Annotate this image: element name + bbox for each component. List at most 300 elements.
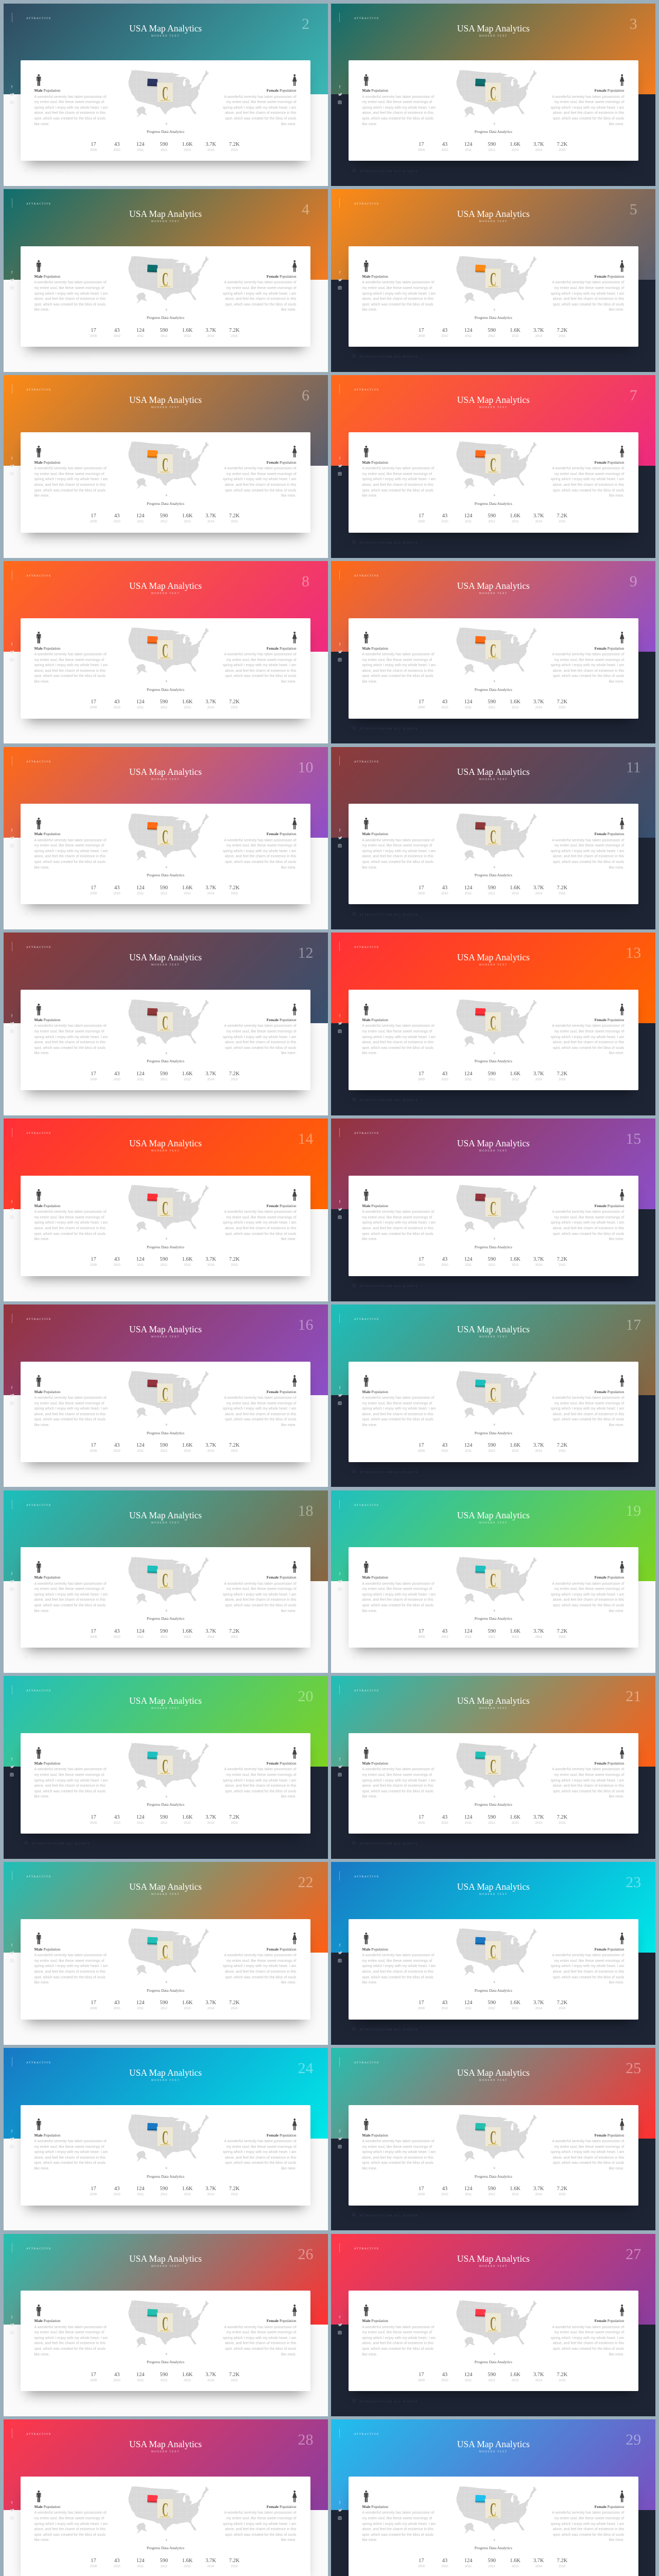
stats heading: Progress Data Analytics xyxy=(475,873,512,877)
stats: 17 xyxy=(419,1257,424,1262)
title: USA Map Analytics xyxy=(129,2439,202,2449)
male text: A wonderful serenity has taken possession of xyxy=(362,653,434,656)
male text: like mine. xyxy=(362,308,377,312)
stats: 3.7K xyxy=(205,2186,216,2192)
stats: 2015 xyxy=(231,706,238,709)
male text: alone, and feel the charm of existence in this xyxy=(34,1413,106,1416)
female text xyxy=(551,1953,624,1986)
header gradient xyxy=(331,1490,655,1581)
stats xyxy=(82,1814,252,1825)
subtitle: MODERN TEXT xyxy=(151,406,180,409)
stats: 2011 xyxy=(137,1264,144,1267)
label: ATTRACTIVE xyxy=(354,17,379,20)
female text: A wonderful serenity has taken possession of xyxy=(224,653,297,656)
male heading: Male Population xyxy=(34,274,60,279)
female text: A wonderful serenity has taken possession of xyxy=(224,281,297,284)
stats: 2015 xyxy=(559,335,566,338)
stats: 2009 xyxy=(90,2379,97,2382)
header gradient xyxy=(3,1676,327,1767)
male text: spring which I enjoy with my whole heart. I am xyxy=(34,2150,108,2154)
footer xyxy=(352,1283,418,1289)
subtitle: MODERN TEXT xyxy=(151,778,180,781)
stats: 1.6K xyxy=(182,885,193,891)
female text: alone, and feel the charm of existence in this xyxy=(225,2342,297,2345)
stats: 2015 xyxy=(559,520,566,523)
stats: 2015 xyxy=(231,1078,238,1081)
male text: spring which I enjoy with my whole heart. I am xyxy=(34,1036,108,1039)
page number: 12 xyxy=(298,944,313,961)
male text: A wonderful serenity has taken possession of xyxy=(362,839,434,842)
social icons xyxy=(9,1570,14,1591)
female icon xyxy=(292,260,297,272)
stats: 2010 xyxy=(441,1636,448,1639)
stats: 43 xyxy=(114,699,119,705)
female text: like mine. xyxy=(281,1238,297,1241)
male text xyxy=(34,1024,108,1057)
stats: 43 xyxy=(114,1257,119,1262)
stats: 43 xyxy=(442,1815,447,1820)
female text: my entire soul, like these sweet mornings of xyxy=(227,1402,297,1405)
stats: 43 xyxy=(442,142,447,147)
stats: 1.6K xyxy=(182,2000,193,2006)
male text xyxy=(34,1582,108,1614)
male text: spring which I enjoy with my whole heart. I am xyxy=(362,1593,436,1597)
male icon xyxy=(363,632,369,643)
stats: 2012 xyxy=(161,1264,167,1267)
footer xyxy=(352,2027,418,2032)
female text: my entire soul, like these sweet mornings of xyxy=(227,286,297,290)
stats: 2013 xyxy=(512,706,518,709)
male text: spring which I enjoy with my whole heart. I am xyxy=(362,1964,436,1968)
stats xyxy=(409,699,579,710)
stats: 17 xyxy=(91,328,96,333)
stats: 2010 xyxy=(113,1450,120,1453)
stats: 17 xyxy=(419,142,424,147)
female icon xyxy=(291,446,297,457)
slide 26 xyxy=(3,2234,327,2416)
stats: 17 xyxy=(419,2000,424,2006)
female text: spot, which was created for the bliss of souls xyxy=(553,489,624,493)
female text: alone, and feel the charm of existence in this xyxy=(553,1784,624,1788)
female text: A wonderful serenity has taken possession of xyxy=(552,467,624,470)
label: ATTRACTIVE xyxy=(26,17,51,20)
male text: spring which I enjoy with my whole heart. I am xyxy=(362,478,436,481)
stats: 2015 xyxy=(231,520,238,523)
female text: alone, and feel the charm of existence in this xyxy=(553,483,624,487)
stats xyxy=(82,2185,252,2197)
female text: spot, which was created for the bliss of souls xyxy=(225,2161,297,2165)
social icons xyxy=(337,1384,342,1405)
stats: 2009 xyxy=(418,149,425,152)
female text: my entire soul, like these sweet mornings of xyxy=(554,472,624,476)
stats: 17 xyxy=(91,2558,96,2564)
header gradient xyxy=(3,561,327,652)
card xyxy=(349,2105,638,2206)
female text: A wonderful serenity has taken possession of xyxy=(552,839,624,842)
subtitle: MODERN TEXT xyxy=(151,1150,180,1153)
stats: 2015 xyxy=(231,1636,238,1639)
stats: 17 xyxy=(419,1815,424,1820)
female text: A wonderful serenity has taken possession of xyxy=(224,1210,297,1214)
male text: my entire soul, like these sweet mornings of xyxy=(34,1587,104,1591)
slide 7 xyxy=(331,375,655,558)
stats xyxy=(409,1628,579,1639)
female heading: Female Population xyxy=(267,1575,297,1580)
footer xyxy=(352,2213,418,2218)
female text xyxy=(223,1582,297,1614)
USA map: C xyxy=(490,1569,496,1590)
female text: like mine. xyxy=(281,308,297,312)
footer: © xyxy=(352,168,356,173)
footer xyxy=(352,912,418,918)
female text: like mine. xyxy=(609,2538,624,2542)
stats: 7.2K xyxy=(557,1815,567,1820)
female text: like mine. xyxy=(281,2538,297,2542)
female heading: Female Population xyxy=(267,1761,297,1766)
stats: 590 xyxy=(488,1629,496,1634)
subtitle: MODERN TEXT xyxy=(151,1336,180,1338)
male text: spot, which was created for the bliss of souls xyxy=(362,1790,433,1793)
male text xyxy=(34,2139,108,2172)
stats: 1.6K xyxy=(510,1071,521,1077)
stats: 2009 xyxy=(90,1636,97,1639)
stats: 2010 xyxy=(441,892,448,895)
male text: spot, which was created for the bliss of souls xyxy=(362,1976,433,1979)
female icon xyxy=(291,1189,297,1201)
stats: 590 xyxy=(160,1071,168,1077)
female text: A wonderful serenity has taken possession of xyxy=(552,95,624,99)
footer xyxy=(25,1655,90,1661)
female text: spring which I enjoy with my whole heart. I am xyxy=(551,2150,624,2154)
stats: 2010 xyxy=(113,2007,120,2010)
male text: like mine. xyxy=(34,2538,49,2542)
footer: ATTRACTIVEJAM ALL RIGHTS xyxy=(359,2029,418,2031)
stats: 2011 xyxy=(465,149,472,152)
male heading: Male Population xyxy=(362,1575,388,1580)
male text: spot, which was created for the bliss of souls xyxy=(362,1046,433,1050)
social icons xyxy=(10,271,14,290)
USA map: C xyxy=(162,1384,168,1405)
female text: spring which I enjoy with my whole heart. I am xyxy=(551,292,624,296)
female text: alone, and feel the charm of existence in this xyxy=(225,2156,297,2160)
female icon xyxy=(620,74,625,86)
footer: ATTRACTIVEJAM ALL RIGHTS xyxy=(359,171,418,173)
stats: 43 xyxy=(114,142,119,147)
card xyxy=(21,990,310,1090)
social icons xyxy=(337,1756,342,1776)
page number: 17 xyxy=(626,1316,641,1333)
female text: spot, which was created for the bliss of souls xyxy=(225,860,297,864)
male text: my entire soul, like these sweet mornings of xyxy=(362,286,432,290)
stats: 2014 xyxy=(207,2007,214,2010)
stats: 43 xyxy=(442,1443,447,1448)
stats: 590 xyxy=(160,2000,168,2006)
label: ATTRACTIVE xyxy=(354,2247,379,2250)
stats: 2010 xyxy=(441,2565,448,2568)
social icons xyxy=(9,1942,14,1962)
female text xyxy=(223,280,297,312)
stats: 2015 xyxy=(231,2565,238,2568)
stats: 2013 xyxy=(512,1636,518,1639)
female text: my entire soul, like these sweet mornings of xyxy=(227,1959,297,1963)
page number: 24 xyxy=(298,2060,313,2077)
stats: 7.2K xyxy=(557,2372,567,2378)
stats heading: Progress Data Analytics xyxy=(475,2546,512,2550)
stats: 2013 xyxy=(512,520,518,523)
stats: 124 xyxy=(136,513,145,519)
stats: 43 xyxy=(114,885,119,891)
male text: like mine. xyxy=(34,308,49,312)
stats: 124 xyxy=(464,2186,472,2192)
slide 18 xyxy=(3,1490,327,1673)
male text: A wonderful serenity has taken possession of xyxy=(362,95,434,99)
footer: © xyxy=(25,1840,28,1845)
stats: 43 xyxy=(442,1257,447,1262)
stats: 7.2K xyxy=(229,699,239,705)
male text: my entire soul, like these sweet mornings of xyxy=(362,1402,432,1405)
female heading: Female Population xyxy=(267,2318,297,2323)
card xyxy=(21,2105,310,2206)
title: USA Map Analytics xyxy=(457,1696,530,1706)
stats: 2014 xyxy=(535,2565,542,2568)
male text xyxy=(362,1024,436,1057)
page number: 9 xyxy=(630,573,637,590)
stats: 2010 xyxy=(113,1078,120,1081)
female text: my entire soul, like these sweet mornings of xyxy=(227,100,297,104)
female text xyxy=(223,1767,297,1800)
male text: alone, and feel the charm of existence in this xyxy=(34,297,106,301)
stats: 590 xyxy=(160,699,168,705)
page number: 22 xyxy=(298,1874,313,1891)
male heading: Male Population xyxy=(362,88,388,93)
female text: my entire soul, like these sweet mornings of xyxy=(227,472,297,476)
female text: spring which I enjoy with my whole heart. I am xyxy=(223,1407,297,1411)
female text xyxy=(551,2511,624,2544)
stats: 2014 xyxy=(535,2193,542,2196)
stats: 2013 xyxy=(184,1822,191,1825)
footer: ATTRACTIVEJAM ALL RIGHTS xyxy=(32,542,90,545)
USA map: C xyxy=(162,2127,168,2148)
male text: A wonderful serenity has taken possession of xyxy=(34,1954,107,1957)
stats: 1.6K xyxy=(510,328,521,333)
header gradient xyxy=(331,2048,655,2139)
footer: ATTRACTIVEJAM ALL RIGHTS xyxy=(359,1285,418,1288)
stats: 2009 xyxy=(418,1450,425,1453)
stats xyxy=(409,327,579,338)
footer: © xyxy=(25,539,28,545)
female text: my entire soul, like these sweet mornings of xyxy=(227,1030,297,1033)
male text: spot, which was created for the bliss of souls xyxy=(34,2533,106,2537)
footer: © xyxy=(25,725,28,731)
male text: A wonderful serenity has taken possession of xyxy=(34,1582,107,1586)
female text: spring which I enjoy with my whole heart. I am xyxy=(551,1593,624,1597)
title: USA Map Analytics xyxy=(457,2067,530,2078)
subtitle: MODERN TEXT xyxy=(479,2079,508,2082)
female text: spot, which was created for the bliss of souls xyxy=(225,489,297,493)
stats: 2014 xyxy=(535,335,542,338)
stats: 7.2K xyxy=(229,2186,239,2192)
female text xyxy=(223,2511,297,2544)
stats: 1.6K xyxy=(510,1257,521,1262)
female text: like mine. xyxy=(281,1981,297,1985)
female text: spot, which was created for the bliss of souls xyxy=(225,117,297,121)
stats: 3.7K xyxy=(533,1257,544,1262)
female text: my entire soul, like these sweet mornings of xyxy=(554,2145,624,2149)
female text: spring which I enjoy with my whole heart. I am xyxy=(223,1779,297,1783)
stats: 2015 xyxy=(231,1450,238,1453)
male text: A wonderful serenity has taken possession of xyxy=(34,839,107,842)
female text: A wonderful serenity has taken possession of xyxy=(224,467,297,470)
label: ATTRACTIVE xyxy=(354,574,379,578)
stats: 7.2K xyxy=(557,2186,567,2192)
stats: 2011 xyxy=(465,1822,472,1825)
male icon xyxy=(364,260,369,272)
stats: 2009 xyxy=(90,1078,97,1081)
female text xyxy=(551,2325,624,2358)
female text: spot, which was created for the bliss of souls xyxy=(225,1418,297,1421)
stats heading: Progress Data Analytics xyxy=(147,2174,184,2179)
female heading: Female Population xyxy=(595,2318,624,2323)
stats: 2014 xyxy=(207,335,214,338)
stats: 2009 xyxy=(418,1822,425,1825)
page number: 21 xyxy=(626,1688,641,1705)
male text: spring which I enjoy with my whole heart. I am xyxy=(34,2336,108,2340)
female text: spot, which was created for the bliss of souls xyxy=(225,303,297,307)
female text: like mine. xyxy=(609,1609,624,1613)
female text: like mine. xyxy=(609,2167,624,2171)
stats: 2013 xyxy=(512,1450,518,1453)
stats: 2011 xyxy=(465,1450,472,1453)
stats: 3.7K xyxy=(205,1815,216,1820)
footer: ATTRACTIVEJAM ALL RIGHTS xyxy=(359,728,418,731)
female text: my entire soul, like these sweet mornings of xyxy=(227,844,297,848)
stats heading: Progress Data Analytics xyxy=(475,129,512,134)
female text: spot, which was created for the bliss of souls xyxy=(553,2161,624,2165)
male text: like mine. xyxy=(34,1423,49,1427)
stats xyxy=(82,885,252,896)
male icon xyxy=(36,1747,41,1759)
stats: 3.7K xyxy=(205,328,216,333)
female text: spring which I enjoy with my whole heart. I am xyxy=(223,1964,297,1968)
stats: 17 xyxy=(91,699,96,705)
male text: alone, and feel the charm of existence in this xyxy=(362,669,433,673)
female text: spot, which was created for the bliss of souls xyxy=(225,1232,297,1236)
stats: 2010 xyxy=(113,2379,120,2382)
female text: spot, which was created for the bliss of souls xyxy=(553,2533,624,2537)
stats: 2009 xyxy=(90,892,97,895)
stats: 590 xyxy=(160,1443,168,1448)
stats: 17 xyxy=(419,328,424,333)
footer: ATTRACTIVEJAM ALL RIGHTS xyxy=(32,1843,90,1845)
female text: spot, which was created for the bliss of souls xyxy=(553,860,624,864)
header gradient xyxy=(331,4,655,94)
male text: spring which I enjoy with my whole heart. I am xyxy=(362,850,436,853)
stats: 2014 xyxy=(535,892,542,895)
stats: 2011 xyxy=(465,892,472,895)
social icons xyxy=(337,2499,342,2520)
stats: 2012 xyxy=(161,1822,167,1825)
slide 3 xyxy=(331,4,655,186)
male text xyxy=(362,1396,436,1428)
stats xyxy=(82,2371,252,2383)
male text xyxy=(34,466,108,499)
subtitle: MODERN TEXT xyxy=(479,35,508,38)
stats: 2013 xyxy=(512,892,518,895)
title: USA Map Analytics xyxy=(129,2253,202,2264)
male text xyxy=(34,2511,108,2544)
female text: my entire soul, like these sweet mornings of xyxy=(227,2517,297,2520)
male text: my entire soul, like these sweet mornings of xyxy=(362,1959,432,1963)
stats: 17 xyxy=(419,2372,424,2378)
page number: 14 xyxy=(298,1130,313,1147)
subtitle: MODERN TEXT xyxy=(479,2451,508,2453)
header gradient xyxy=(331,561,655,652)
stats: 2009 xyxy=(90,706,97,709)
female text xyxy=(223,95,297,126)
slide 27 xyxy=(331,2234,655,2416)
social icons xyxy=(9,455,14,476)
social icons xyxy=(9,1012,14,1033)
male text: spot, which was created for the bliss of souls xyxy=(362,117,433,121)
male text: A wonderful serenity has taken possession of xyxy=(362,1024,434,1028)
stats: 2011 xyxy=(465,2193,472,2196)
USA map xyxy=(405,1172,570,1264)
male text: my entire soul, like these sweet mornings of xyxy=(34,1030,104,1033)
stats: 124 xyxy=(136,1629,145,1634)
footer: ATTRACTIVEJAM ALL RIGHTS xyxy=(359,2401,418,2403)
stats heading: Progress Data Analytics xyxy=(475,1616,512,1621)
stats: 1.6K xyxy=(182,1071,193,1077)
stats: 17 xyxy=(419,2186,424,2192)
USA map: C xyxy=(490,1941,496,1962)
female heading: Female Population xyxy=(267,646,297,651)
stats: 2013 xyxy=(512,1078,518,1081)
male text: my entire soul, like these sweet mornings of xyxy=(362,2331,432,2334)
slide 23 xyxy=(331,1862,655,2045)
female text xyxy=(223,652,297,685)
stats: 124 xyxy=(136,1257,145,1262)
male text: alone, and feel the charm of existence in this xyxy=(34,1784,106,1788)
female text: alone, and feel the charm of existence in this xyxy=(225,1413,297,1416)
footer xyxy=(25,540,90,546)
stats: 2012 xyxy=(488,1822,495,1825)
stats: 2014 xyxy=(207,1450,214,1453)
stats: 2012 xyxy=(161,149,167,152)
male text: alone, and feel the charm of existence in this xyxy=(34,483,106,487)
USA map xyxy=(405,1915,570,2008)
stats: 2012 xyxy=(488,2379,495,2382)
male text: spot, which was created for the bliss of souls xyxy=(34,860,106,864)
header gradient xyxy=(331,1118,655,1209)
stats: 3.7K xyxy=(533,1071,544,1077)
female text: like mine. xyxy=(609,680,624,684)
stats: 7.2K xyxy=(557,885,567,891)
stats: 43 xyxy=(442,328,447,333)
stats xyxy=(409,1256,579,1267)
female icon xyxy=(619,1561,625,1573)
header gradient xyxy=(331,2419,655,2510)
stats: 17 xyxy=(91,2372,96,2378)
male text: A wonderful serenity has taken possession of xyxy=(362,2140,434,2143)
stats: 1.6K xyxy=(182,2372,193,2378)
female icon xyxy=(619,1189,625,1201)
male text: A wonderful serenity has taken possession of xyxy=(34,1210,107,1214)
male text xyxy=(34,1767,108,1800)
footer xyxy=(25,353,90,359)
male text: my entire soul, like these sweet mornings of xyxy=(362,1030,432,1033)
stats: 43 xyxy=(442,699,447,705)
stats: 2013 xyxy=(184,2379,191,2382)
